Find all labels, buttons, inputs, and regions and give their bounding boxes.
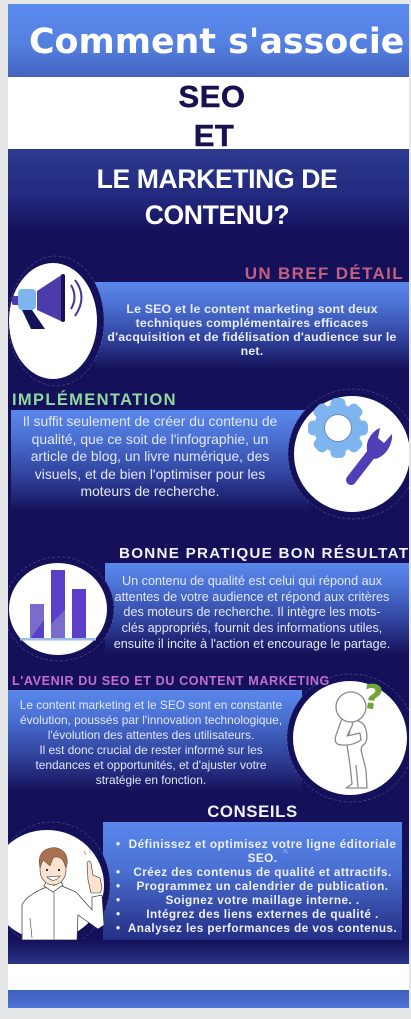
panel: conseils: [103, 822, 402, 940]
text: implémentation: moteurs de recherche.: [80, 483, 219, 499]
text: l'avenir: tendances et opportunités, et d'ajuster votre: [36, 758, 266, 772]
heading: conseils: CONSEILS: [207, 802, 298, 821]
footer gradient: [8, 940, 409, 964]
list items: Intégrez des liens externes de qualité .: [146, 908, 379, 921]
text: implémentation: [23, 413, 277, 499]
text: bonne pratique: clés appropriés, fournit des informations utiles,: [122, 621, 382, 635]
text: bonne pratique: des moteurs de recherche. Il intègre les mots-: [123, 605, 381, 619]
text: l'avenir: évolution, poussés par l'innovation technologique,: [20, 713, 282, 727]
title: Comment s'associe: Comment s'associe: [29, 22, 404, 62]
text: un bref détail: [107, 302, 397, 358]
title: Le marketing de contenu: CONTENU?: [145, 200, 289, 230]
list items: Soignez votre maillage interne. .: [165, 894, 360, 907]
title: ET: ET: [194, 118, 234, 153]
list items: Analysez les performances de vos contenus.: [128, 922, 397, 935]
list: conseils: [116, 838, 397, 935]
heading: bonne pratique bon résultat: BONNE PRATIQUE BON RÉSULTAT: [119, 545, 409, 562]
bullets: •: [116, 908, 121, 921]
heading: implémentation: IMPLÉMENTATION: [12, 391, 177, 409]
bullets: •: [116, 922, 121, 935]
list items: [128, 838, 397, 935]
title: Le marketing de contenu: LE MARKETING DE: [97, 164, 337, 194]
bullets: •: [116, 866, 121, 879]
panel: implémentation: [11, 410, 309, 522]
text: l'avenir: [20, 698, 282, 787]
icon: megaphone: [8, 256, 104, 386]
text: l'avenir: l'évolution des attentes des utilisateurs.: [48, 728, 254, 742]
icon: man pointing up: [8, 822, 110, 940]
header band: [8, 4, 409, 77]
text: bonne pratique: [114, 574, 390, 651]
text: implémentation: Il suffit seulement de créer du contenu de: [23, 413, 277, 429]
panel: l'avenir: [8, 690, 302, 802]
navy title gradient: [8, 149, 409, 249]
white title band: [8, 77, 409, 149]
bullets: •: [116, 880, 121, 893]
panel: un bref détail: [95, 282, 409, 378]
text: implémentation: visuels, et de bien l'optimiser pour les: [35, 466, 265, 482]
list items: SEO.: [248, 852, 277, 865]
footer blue band: [8, 990, 409, 1008]
panel: bonne pratique: [105, 563, 409, 663]
text: l'avenir: Le content marketing et le SEO sont en constante: [20, 698, 282, 712]
text: l'avenir: Il est donc crucial de rester informé sur les: [39, 743, 263, 757]
text: bonne pratique: ensuite il incite à l'action et encourage le partage.: [114, 637, 390, 651]
bullets: •: [116, 838, 121, 851]
bullets: [116, 838, 121, 935]
text: un bref détail: net.: [241, 344, 263, 358]
heading: un bref détail: UN BREF DÉTAIL: [245, 264, 404, 283]
icon: thinking person: ?: [360, 677, 385, 719]
icon: bar chart: [8, 556, 114, 662]
text: un bref détail: Le SEO et le content marketing sont deux: [126, 302, 378, 316]
heading: l'avenir du SEO: L'AVENIR DU SEO ET DU CONTENT MARKETING: [12, 674, 330, 688]
text: un bref détail: techniques complémentaires efficaces: [136, 316, 368, 330]
footer white band: [8, 964, 409, 990]
icon: thinking person: [286, 674, 409, 802]
text: bonne pratique: Un contenu de qualité est celui qui répond aux: [122, 574, 382, 588]
title: Le marketing de contenu: [97, 164, 337, 230]
small mark: n.: [283, 849, 288, 855]
text: implémentation: article de blog, un livre numérique, des: [31, 448, 269, 464]
text: bonne pratique: attentes de votre audience et répond aux critères: [115, 590, 389, 604]
bullets: •: [116, 894, 121, 907]
text: implémentation: qualité, que ce soit de l'infographie, un: [32, 430, 268, 446]
list items: Programmez un calendrier de publication.: [136, 880, 388, 893]
text: l'avenir: stratégie en fonction.: [96, 773, 206, 787]
text: un bref détail: d'acquisition et de fidélisation d'audience sur le: [107, 330, 397, 344]
list items: Créez des contenus de qualité et attractifs.: [133, 866, 392, 879]
icon: gear and wrench: [288, 388, 409, 520]
title: SEO: SEO: [179, 79, 245, 114]
list items: Définissez et optimisez votre ligne éditoriale: [129, 838, 396, 851]
